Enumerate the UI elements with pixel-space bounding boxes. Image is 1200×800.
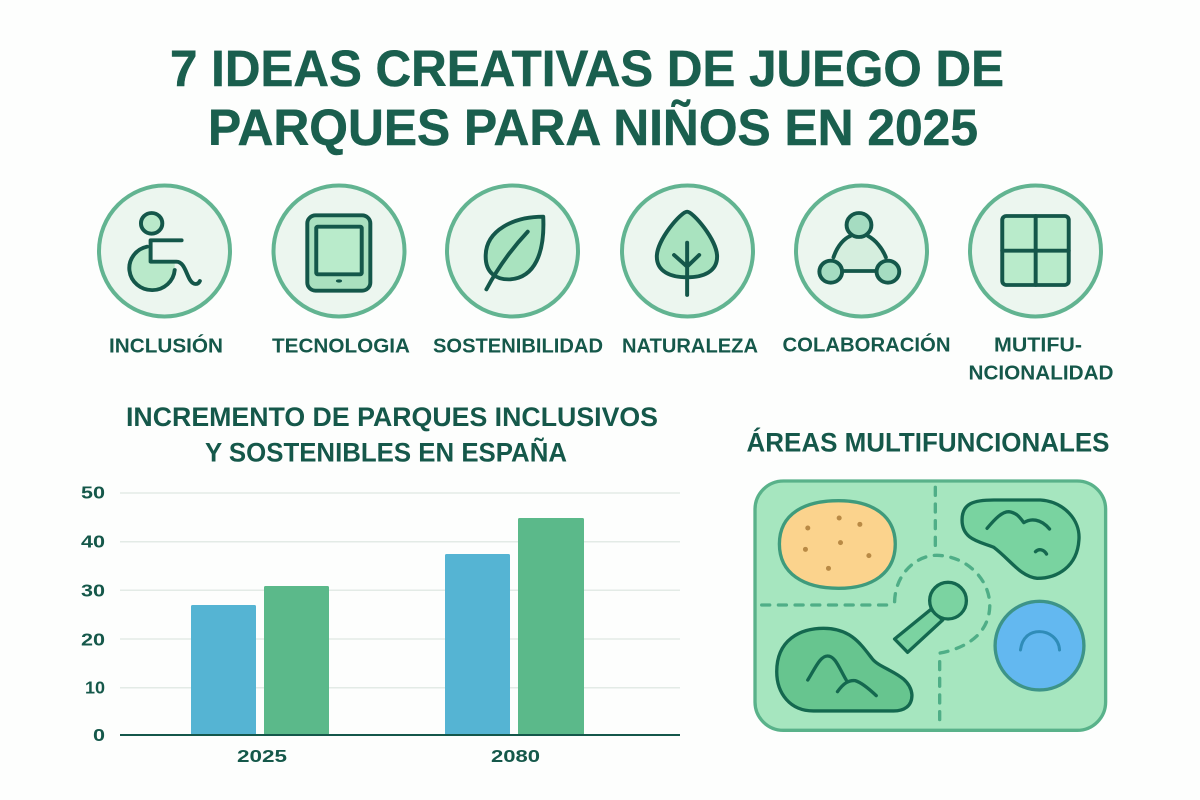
icon: inclusion wheelchair — [99, 186, 230, 316]
title — [170, 40, 1004, 156]
icon: sustainability leaf — [447, 186, 578, 316]
chart heading: Y SOSTENIBLES EN ESPAÑA — [205, 438, 567, 468]
y axis labels: 0 — [93, 725, 105, 745]
y axis labels: 50 — [81, 482, 105, 502]
icon: collaboration network — [796, 186, 927, 316]
category labels: MUTIFU- — [994, 334, 1082, 356]
hill top right — [962, 500, 1079, 578]
category labels: SOSTENIBILIDAD — [433, 336, 603, 358]
bars 2080 — [445, 518, 584, 735]
category labels — [109, 332, 1114, 384]
central play structure — [895, 582, 966, 652]
chart heading — [126, 402, 658, 468]
y axis labels — [81, 482, 105, 745]
chart heading: INCREMENTO DE PARQUES INCLUSIVOS — [126, 402, 658, 432]
y axis labels: 30 — [81, 580, 105, 600]
category labels: NCIONALIDAD — [968, 362, 1114, 384]
category labels: TECNOLOGIA — [272, 336, 410, 358]
icon: nature tree — [622, 186, 753, 316]
title: 7 IDEAS CREATIVAS DE JUEGO DE — [170, 40, 1004, 97]
icon: technology tablet — [274, 186, 404, 316]
hill bottom left — [777, 628, 912, 711]
park map — [755, 481, 1106, 730]
title: PARQUES PARA NIÑOS EN 2025 — [208, 98, 978, 156]
x axis labels: 2025 — [237, 746, 287, 766]
x axis labels: 2080 — [491, 746, 540, 766]
category labels: NATURALEZA — [622, 336, 758, 358]
water pond — [995, 601, 1084, 690]
icon: multifunctional grid — [970, 186, 1101, 316]
x axis labels — [237, 746, 540, 766]
category labels: COLABORACIÓN — [782, 332, 950, 356]
category labels: INCLUSIÓN — [109, 334, 223, 358]
y axis labels: 10 — [85, 678, 105, 698]
sand area — [779, 501, 895, 588]
bars 2025 — [191, 586, 329, 735]
y axis labels: 20 — [81, 630, 105, 650]
bar chart — [81, 482, 680, 766]
y axis labels: 40 — [81, 532, 105, 552]
map heading: ÁREAS MULTIFUNCIONALES — [746, 428, 1110, 458]
